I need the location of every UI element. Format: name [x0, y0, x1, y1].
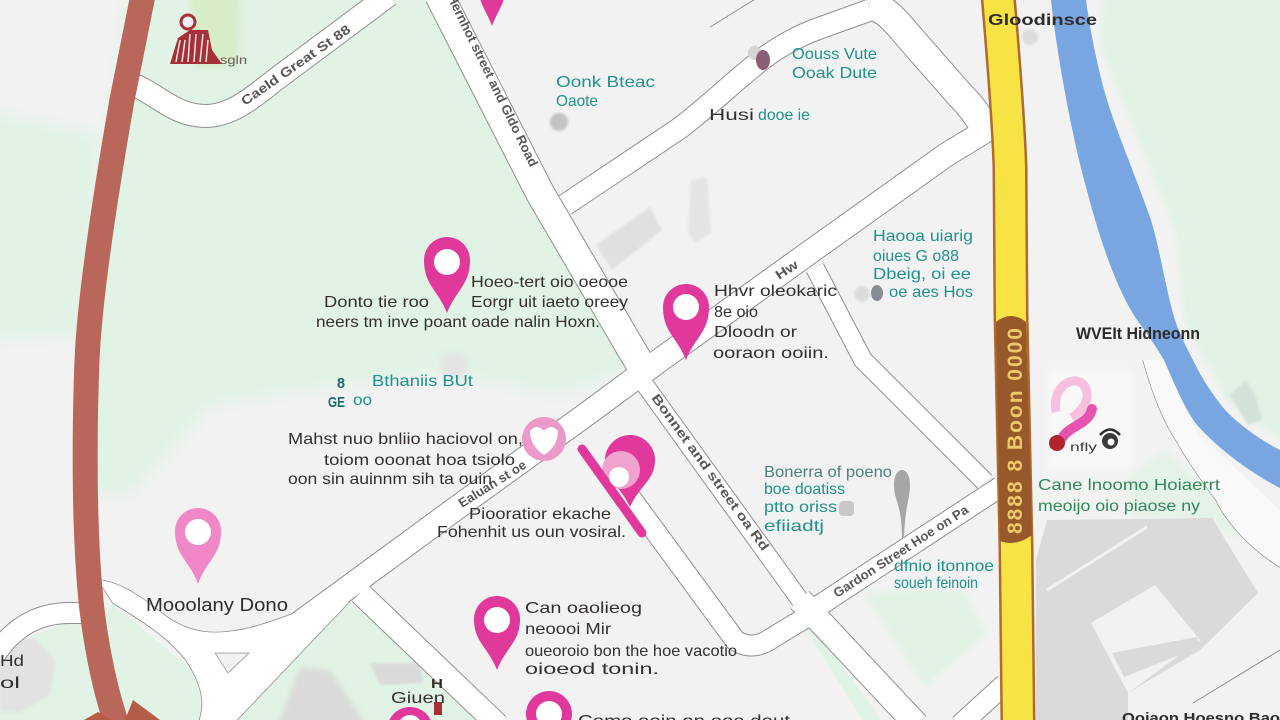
- black text: center left pin: neers tm inve poant oade nalin Hoxn.: [316, 314, 600, 331]
- teal text: bottom right: soueh feinoin: [894, 575, 978, 592]
- teal text: lower right: boe doatiss: [764, 481, 845, 498]
- teal text: park label: [328, 373, 474, 411]
- green text: right: Cane lnoomo Hoiaerrt: [1038, 477, 1221, 494]
- highway shield label: 8888 8 Boon 0000: [1004, 328, 1027, 534]
- black text: left block: Mahst nuo bnliio haciovol on,: [288, 431, 523, 448]
- teal text: top center: Oaote: [556, 93, 598, 110]
- teal text: right block: Dbeig, oi ee: [873, 266, 971, 283]
- road label center: Ealuan st oe: [456, 457, 529, 511]
- road label top left: Caeld Great St 88: [238, 22, 353, 108]
- text: hotel label: Husi: [709, 107, 754, 124]
- teal text: right block: oe aes Hos: [889, 284, 973, 301]
- label: left edge: ol: [0, 675, 20, 692]
- teal text: right block: oiues G o88: [873, 248, 959, 265]
- pin: faded small: [522, 417, 566, 461]
- teal text: park label: GE: [328, 394, 345, 411]
- gray smudge near label: [1022, 29, 1038, 45]
- black text: bottom center pin: oioeod tonin.: [525, 661, 659, 678]
- icon: landmark: [170, 15, 247, 67]
- black text: center pin: 8e oio: [714, 304, 758, 321]
- road label right: Hw: [772, 256, 802, 283]
- pin: bottom partly cut: [387, 707, 433, 720]
- black text: bottom center pin: Can oaolieog: [525, 600, 642, 617]
- black text: center left pin: Hoeo-tert oio oeooe: [471, 274, 628, 291]
- teal text: park label: Bthaniis BUt: [372, 373, 474, 390]
- black text: center left pin: Eorgr uit iaeto oreey: [471, 294, 628, 311]
- teal text: top right: Oouss Vute: [792, 46, 877, 63]
- road label lower: Gardon Street Hoe on Pa: [830, 501, 972, 601]
- label: top right highway: Gloodinsce: [988, 12, 1097, 29]
- teal text: lower right: efiiadtj: [764, 518, 824, 535]
- label: bottom left pin: Mooolany Dono: [146, 595, 288, 615]
- black text: bottom center pin: oueoroio bon the hoe vacotio: [525, 643, 737, 660]
- label: bottom small: Giuen: [391, 690, 445, 707]
- black text: below center: Fohenhit us oun vosiral.: [437, 524, 626, 541]
- gray buildings: [0, 177, 1262, 720]
- river: [1051, 0, 1280, 488]
- gray location dots: [550, 46, 910, 538]
- black text: left block: [288, 431, 523, 488]
- icon: landmark: sgln: [220, 53, 247, 67]
- black text: center pin: [713, 283, 837, 362]
- teal text: right block: Haooa uiarig: [873, 228, 973, 245]
- teal text: lower right: Bonerra of poeno: [764, 464, 892, 481]
- pin: center left: [424, 237, 470, 313]
- title label right: WVEIt Hidneonn: [1076, 324, 1200, 343]
- black text: center left pin: Donto tie roo: [324, 294, 429, 311]
- teal text: park label: oo: [353, 392, 372, 409]
- green text: right: meoijo oio piaose ny: [1038, 498, 1200, 515]
- road: brown highway: [85, 0, 143, 720]
- label: bottom small: H: [431, 676, 443, 691]
- label: left edge: Hd: [0, 653, 24, 670]
- black text: center pin: ooraon ooiin.: [713, 345, 829, 362]
- teal text: top center: [556, 74, 655, 110]
- red arrow tips: [84, 700, 160, 720]
- pin: overlapping center pin: [582, 435, 655, 533]
- teal text: bottom right: [894, 558, 994, 592]
- pin: bottom center: [474, 596, 520, 670]
- green text: right: [1038, 477, 1221, 515]
- icon: right destination marker: nfly: [1070, 440, 1097, 454]
- black text: bottom center pin: neoooi Mir: [525, 621, 612, 638]
- teal text: top center: Oonk Bteac: [556, 74, 655, 91]
- pin: bottom left light: [175, 508, 221, 584]
- road: yellow highway: [998, 0, 1018, 720]
- black text: below center: Piooratior ekache: [469, 506, 611, 523]
- black text: left block: toiom ooonat hoa tsiolo: [324, 452, 515, 469]
- pin: bottom partly cut 2: [526, 691, 572, 720]
- icon: triangle island: [215, 653, 249, 673]
- icon: right destination marker: [1047, 370, 1132, 468]
- black text: center pin: Hhvr oleokaric: [714, 283, 837, 300]
- black text: left block: oon sin auinnm sih ta ouin: [288, 471, 492, 488]
- black text: center pin: Dloodn or: [714, 324, 798, 341]
- teal text: bottom right: dfnio itonnoe: [894, 558, 994, 575]
- black text: bottom center pin: [525, 600, 737, 678]
- label: left edge: [0, 653, 24, 692]
- teal text: top right: Ooak Dute: [792, 65, 877, 82]
- teal text: right block: [873, 228, 973, 301]
- black text: below center: [437, 506, 626, 541]
- teal text: top right: [792, 46, 877, 82]
- teal text: lower right: ptto oriss: [764, 499, 837, 516]
- teal text: park label: 8: [337, 375, 345, 392]
- label: bottom small: [391, 676, 445, 715]
- teal text: lower right: [764, 464, 892, 535]
- pin: top: [478, 0, 506, 26]
- highway shield label: [996, 316, 1032, 543]
- teal label beside: dooe ie: [758, 107, 810, 124]
- black text: center left pin: [316, 274, 628, 331]
- pin: center: [663, 284, 709, 360]
- road label diagonal middle: Bonnet and street oa Rd: [649, 391, 772, 554]
